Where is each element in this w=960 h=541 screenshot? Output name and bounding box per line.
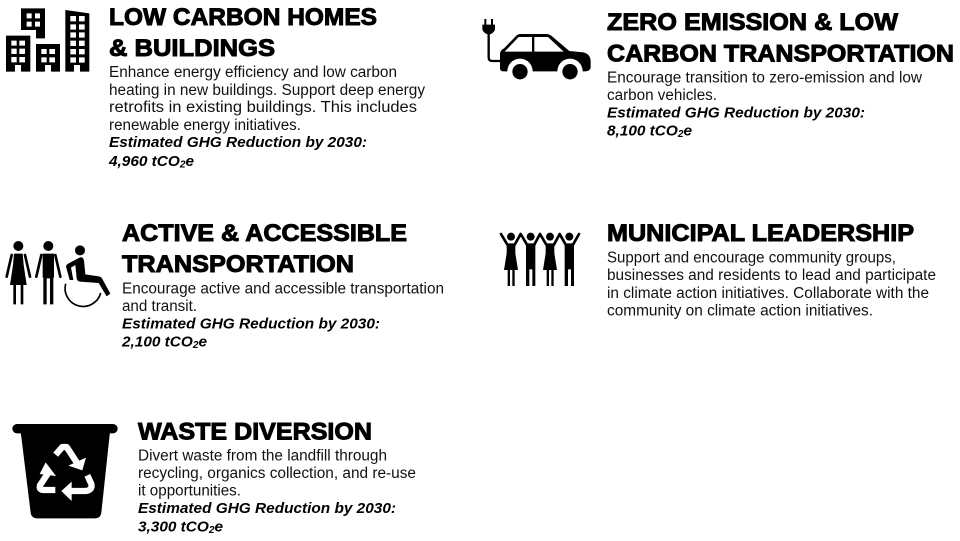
text block: transportation GHG reduction: e bbox=[683, 122, 693, 140]
text block: municipal leadership description bbox=[607, 250, 936, 320]
text block: waste GHG reduction: 2 bbox=[208, 525, 215, 536]
text block: waste description: Divert waste from the landfill through bbox=[138, 448, 387, 464]
text block: waste description: recycling, organics collection, and re-use bbox=[138, 465, 416, 482]
text block: buildings description bbox=[109, 64, 425, 134]
text block: waste GHG reduction bbox=[138, 500, 396, 536]
text block: buildings description: retrofits in existing buildings. This includes bbox=[109, 99, 417, 116]
icon: group with raised arms bbox=[501, 233, 579, 286]
text block: waste description bbox=[138, 448, 416, 500]
text block: transportation description bbox=[607, 70, 923, 104]
heading: zero emission and low carbon transportation: ZERO EMISSION & LOW bbox=[607, 9, 899, 36]
text block: municipal leadership description: Support and encourage community groups, bbox=[607, 250, 896, 266]
text block: municipal leadership description: community on climate action initiatives. bbox=[607, 302, 873, 320]
heading: low carbon homes: & BUILDINGS bbox=[109, 35, 275, 62]
text block: waste description: it opportunities. bbox=[138, 482, 241, 500]
text block: active transportation GHG reduction: 2 bbox=[192, 340, 199, 351]
text block: transportation GHG reduction: Estimated GHG Reduction by 2030: bbox=[607, 104, 865, 122]
text block: transportation GHG reduction bbox=[607, 104, 865, 140]
heading: zero emission and low carbon transportation: CARBON TRANSPORTATION bbox=[607, 40, 954, 68]
panel: low carbon homes and buildings bbox=[6, 4, 425, 170]
heading: active and accessible transportation: ACTIVE & ACCESSIBLE bbox=[122, 220, 407, 247]
panel: waste diversion bbox=[12, 418, 416, 536]
panel: active and accessible transportation bbox=[7, 220, 444, 351]
text block: active transportation GHG reduction: 2,100 tCO bbox=[122, 334, 192, 350]
icon: recycling bin bbox=[12, 424, 118, 518]
text block: active transportation GHG reduction: e bbox=[198, 334, 208, 350]
text block: buildings GHG reduction bbox=[108, 134, 367, 170]
text block: transportation GHG reduction: 2 bbox=[677, 129, 684, 140]
text block: waste GHG reduction: e bbox=[214, 518, 224, 536]
text block: transportation GHG reduction: 8,100 tCO bbox=[607, 122, 677, 140]
heading: low carbon homes bbox=[109, 4, 377, 62]
heading: waste diversion: WASTE DIVERSION bbox=[138, 418, 372, 446]
heading: active and accessible transportation: TRANSPORTATION bbox=[122, 251, 354, 278]
icon: pedestrians and wheelchair user bbox=[7, 241, 110, 306]
text block: municipal leadership description: businesses and residents to lead and participate bbox=[607, 267, 936, 284]
text block: waste GHG reduction: Estimated GHG Reduction by 2030: bbox=[138, 500, 396, 517]
panel: municipal leadership bbox=[501, 220, 936, 320]
text block: active transportation GHG reduction: Estimated GHG Reduction by 2030: bbox=[122, 316, 380, 332]
icon: electric car with plug bbox=[482, 19, 591, 84]
text block: active transportation description: Encourage active and accessible transportation bbox=[122, 280, 444, 298]
text block: buildings GHG reduction: Estimated GHG Reduction by 2030: bbox=[109, 134, 367, 151]
heading: municipal leadership: MUNICIPAL LEADERSHIP bbox=[607, 220, 914, 247]
text block: active transportation description bbox=[122, 280, 444, 315]
text block: buildings GHG reduction: 4,960 tCO bbox=[109, 153, 179, 170]
text block: buildings GHG reduction: e bbox=[185, 153, 195, 170]
text block: transportation description: Encourage transition to zero-emission and low bbox=[607, 70, 923, 86]
text block: municipal leadership description: in climate action initiatives. Collaborate with the bbox=[607, 285, 929, 302]
heading: zero emission and low carbon transportation bbox=[607, 9, 954, 68]
text block: buildings GHG reduction: 2 bbox=[179, 160, 186, 170]
text block: buildings description: heating in new buildings. Support deep energy bbox=[109, 82, 425, 99]
icon: city buildings bbox=[6, 8, 89, 72]
heading: active and accessible transportation bbox=[122, 220, 407, 278]
text block: waste GHG reduction: 3,300 tCO bbox=[138, 518, 208, 536]
text block: transportation description: carbon vehicles. bbox=[607, 87, 717, 104]
text block: buildings description: Enhance energy efficiency and low carbon bbox=[109, 64, 397, 81]
panel: zero emission and low carbon transportation bbox=[482, 9, 954, 140]
text block: active transportation description: and transit. bbox=[122, 298, 197, 315]
heading: low carbon homes: LOW CARBON HOMES bbox=[109, 4, 377, 31]
text block: buildings description: renewable energy initiatives. bbox=[109, 117, 301, 134]
text block: active transportation GHG reduction bbox=[121, 316, 380, 351]
